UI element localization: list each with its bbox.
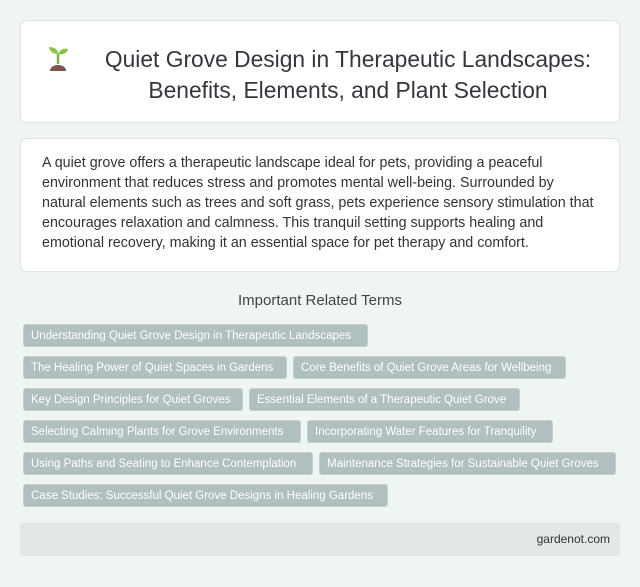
footer [20,523,620,556]
tag 7 [307,420,553,443]
tag 7: Incorporating Water Features for Tranquility [315,426,536,438]
tag 6 [23,420,301,443]
description text: emotional recovery, making it an essential space for pet therapy and comfort. [42,235,529,251]
tag 3 [293,356,566,379]
tag 2 [23,356,287,379]
footer text: gardenot.com [537,532,610,546]
tag 3: Core Benefits of Quiet Grove Areas for Wellbeing [301,362,551,374]
header panel [20,20,620,123]
tag 4 [23,388,243,411]
tag 9: Maintenance Strategies for Sustainable Quiet Groves [327,458,599,470]
description text: encourages relaxation and calmness. This tranquil setting supports healing and [42,215,543,231]
heading: related terms: Important Related Terms [238,292,402,309]
description text [42,155,594,251]
description text: A quiet grove offers a therapeutic landscape ideal for pets, providing a peaceful [42,155,542,171]
tag 4: Key Design Principles for Quiet Groves [31,394,230,406]
tag 6: Selecting Calming Plants for Grove Environments [31,426,283,438]
tag 8: Using Paths and Seating to Enhance Contemplation [31,458,296,470]
tag 9 [319,452,616,475]
tag 5: Essential Elements of a Therapeutic Quiet Grove [257,394,506,406]
icon: seedling [49,47,68,71]
tag 1 [23,324,368,347]
description text: environment that reduces stress and promotes mental well-being. Surrounded by [42,175,554,191]
tag 10 [23,484,388,507]
tag 2: The Healing Power of Quiet Spaces in Gardens [31,362,273,374]
description panel [20,138,620,272]
tag 8 [23,452,313,475]
tag 5 [249,388,520,411]
tag 1: Understanding Quiet Grove Design in Therapeutic Landscapes [31,330,351,342]
description text: natural elements such as trees and soft grass, pets experience sensory stimulation that [42,195,594,211]
title: Quiet Grove Design in Therapeutic Landscapes: Benefits, Elements, and Plant Selection [105,46,591,103]
tag 10: Case Studies: Successful Quiet Grove Designs in Healing Gardens [31,490,373,502]
